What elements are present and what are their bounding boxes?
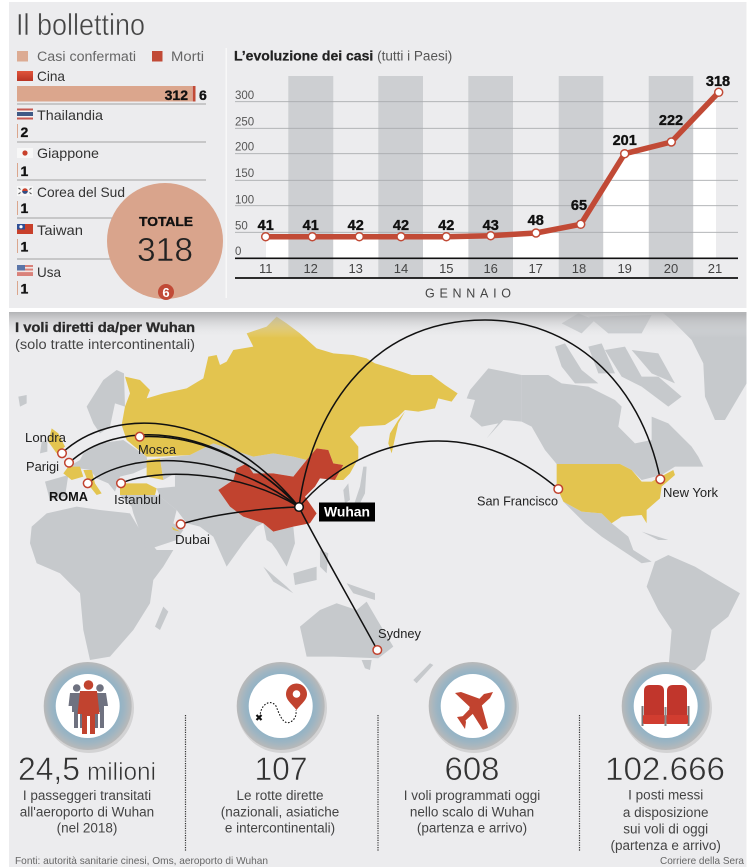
South America <box>647 555 740 670</box>
total circle <box>107 183 223 300</box>
land: grey continents <box>18 370 433 683</box>
x axis labels: 12 <box>303 261 318 276</box>
data labels <box>258 74 730 234</box>
description: (partenza e arrivo) <box>611 838 721 853</box>
row: Thailandia: Thailandia <box>37 107 103 123</box>
city labels: Londra <box>25 431 66 445</box>
data labels: 41 <box>303 218 319 234</box>
Middle East and Arabia <box>120 495 183 550</box>
data labels: 43 <box>483 218 499 234</box>
row: Usa: 1 <box>20 280 28 296</box>
land: USA yellow <box>557 464 675 523</box>
stat: passengers <box>18 662 156 836</box>
value: 608 <box>444 751 500 787</box>
land: visited countries yellow <box>48 317 458 532</box>
icon: route pin <box>237 662 327 753</box>
y axis labels: 250 <box>235 116 254 128</box>
stat: routes <box>221 662 339 836</box>
description <box>221 788 339 836</box>
row: Corea del Sud: 1 <box>20 200 28 216</box>
total circle: TOTALE <box>139 214 193 229</box>
city labels: Istanbul <box>114 493 161 507</box>
legend: Morti <box>171 49 204 64</box>
y axis labels: 0 <box>235 246 241 258</box>
credit: Corriere della Sera <box>660 855 744 867</box>
Mexico, Central America, Cuba <box>563 502 652 563</box>
data labels: 41 <box>258 218 274 234</box>
panel divider <box>226 48 227 298</box>
flight routes <box>62 320 660 650</box>
city labels: New York <box>663 486 719 500</box>
icon: plane <box>429 662 519 753</box>
source note: Fonti: autorità sanitarie cinesi, Oms, aeroporto di Wuhan <box>15 855 268 867</box>
y axis labels: 200 <box>235 142 254 154</box>
map heading: (solo tratte intercontinentali) <box>15 337 195 352</box>
data labels: 42 <box>438 218 454 234</box>
Greenland <box>663 313 747 420</box>
description: all'aeroporto di Wuhan <box>20 804 154 820</box>
row: Cina: Cina <box>37 68 65 84</box>
row: Thailandia <box>17 107 103 140</box>
row: Giappone <box>17 145 99 179</box>
city labels: Dubai <box>175 533 210 547</box>
description: I voli programmati oggi <box>404 788 540 803</box>
row: Corea del Sud: Corea del Sud <box>37 184 125 200</box>
x axis labels: 17 <box>528 261 543 276</box>
data labels: 42 <box>348 218 364 234</box>
description <box>611 788 721 853</box>
data line <box>266 92 719 237</box>
stat: passengers: milioni <box>87 758 156 786</box>
description: (nel 2018) <box>57 820 117 836</box>
description: Le rotte dirette <box>236 788 324 803</box>
x axis labels <box>259 261 722 276</box>
value: 24,5 <box>18 751 80 787</box>
line chart <box>235 74 738 300</box>
Australia <box>300 602 393 658</box>
South-East Asia <box>263 523 295 567</box>
world map <box>9 312 747 683</box>
y axis labels: 50 <box>235 221 248 233</box>
x axis labels: 21 <box>708 261 722 276</box>
y axis labels <box>235 90 254 258</box>
row: Giappone: Giappone <box>37 145 99 161</box>
panel: page background <box>9 2 746 308</box>
row: Thailandia: 2 <box>20 124 28 140</box>
x axis labels: 11 <box>259 261 272 276</box>
row: Taiwan: 1 <box>20 238 28 254</box>
map heading <box>15 319 195 352</box>
Korea and Japan <box>343 483 350 503</box>
city markers <box>58 432 665 654</box>
x axis labels: 16 <box>483 261 498 276</box>
Wuhan label <box>319 502 375 522</box>
land: China red <box>218 448 343 532</box>
legend: Casi confermati <box>37 49 136 64</box>
data labels: 65 <box>571 198 587 214</box>
chart heading: L’evoluzione dei casi (tutti i Paesi) <box>234 48 452 64</box>
total circle: 318 <box>137 231 193 268</box>
India <box>200 516 263 566</box>
x axis labels: 20 <box>664 261 678 276</box>
legend <box>17 49 204 64</box>
description: nello scalo di Wuhan <box>410 804 534 820</box>
value: 102.666 <box>605 751 725 787</box>
x axis labels: 14 <box>394 261 408 276</box>
value: 107 <box>254 751 308 787</box>
row: Taiwan <box>17 222 83 254</box>
description: (partenza e arrivo) <box>417 820 527 836</box>
top fade <box>9 312 747 338</box>
description: sui voli di oggi <box>623 822 708 836</box>
panel: map background <box>9 312 746 867</box>
row: Cina: 312 <box>165 87 188 103</box>
Central Asia, Iran and Pakistan <box>157 443 307 537</box>
stat: seats <box>605 662 725 853</box>
total circle: 6 <box>162 285 170 300</box>
title: Il bollettino <box>16 7 145 42</box>
description: I posti messi <box>628 788 703 802</box>
x axis labels: 18 <box>572 261 586 276</box>
country bars <box>17 68 207 296</box>
Tasmania and New Zealand <box>362 660 372 670</box>
city labels: Sydney <box>378 627 422 641</box>
y axis labels: 150 <box>235 168 254 180</box>
row: Corea del Sud <box>17 184 125 216</box>
x axis labels: 19 <box>617 261 632 276</box>
x axis labels: 13 <box>348 261 363 276</box>
Wuhan marker <box>295 503 303 511</box>
Wuhan label: Wuhan <box>324 504 370 520</box>
Arctic islands <box>555 343 598 383</box>
description: a disposizione <box>623 805 708 820</box>
city labels: Parigi <box>26 460 59 474</box>
data labels: 222 <box>659 113 683 129</box>
row: Taiwan: Taiwan <box>37 222 83 238</box>
data labels: 318 <box>706 74 730 90</box>
x axis labels: 15 <box>439 261 454 276</box>
city labels <box>25 431 719 641</box>
description: e intercontinentali) <box>225 820 335 836</box>
row: Cina <box>17 68 207 103</box>
city labels: Mosca <box>138 443 176 457</box>
stat: flights <box>404 662 540 836</box>
data labels: 42 <box>393 218 409 234</box>
Alaska and Canada <box>467 368 522 438</box>
y axis labels: 100 <box>235 195 254 207</box>
icon: seats <box>622 662 712 753</box>
row: Giappone: 1 <box>20 163 28 179</box>
Indonesia and Philippines <box>263 567 293 593</box>
row: Cina: 6 <box>199 87 207 103</box>
Africa <box>30 507 173 660</box>
axis title: GENNAIO <box>425 286 511 300</box>
Iceland, Ireland, Scandinavia, Europe <box>18 395 27 407</box>
city labels: San Francisco <box>477 495 558 509</box>
description <box>20 788 154 836</box>
city labels: ROMA <box>49 490 88 504</box>
y axis labels: 300 <box>235 90 254 102</box>
data labels: 201 <box>613 133 637 149</box>
description: I passeggeri transitati <box>23 788 151 803</box>
row: Usa <box>17 264 61 296</box>
row: Usa: Usa <box>37 264 61 280</box>
description <box>404 788 540 836</box>
description: (nazionali, asiatiche <box>221 804 339 820</box>
map heading: I voli diretti da/per Wuhan <box>15 319 195 335</box>
icon: people <box>44 662 134 753</box>
data labels: 48 <box>528 213 544 229</box>
